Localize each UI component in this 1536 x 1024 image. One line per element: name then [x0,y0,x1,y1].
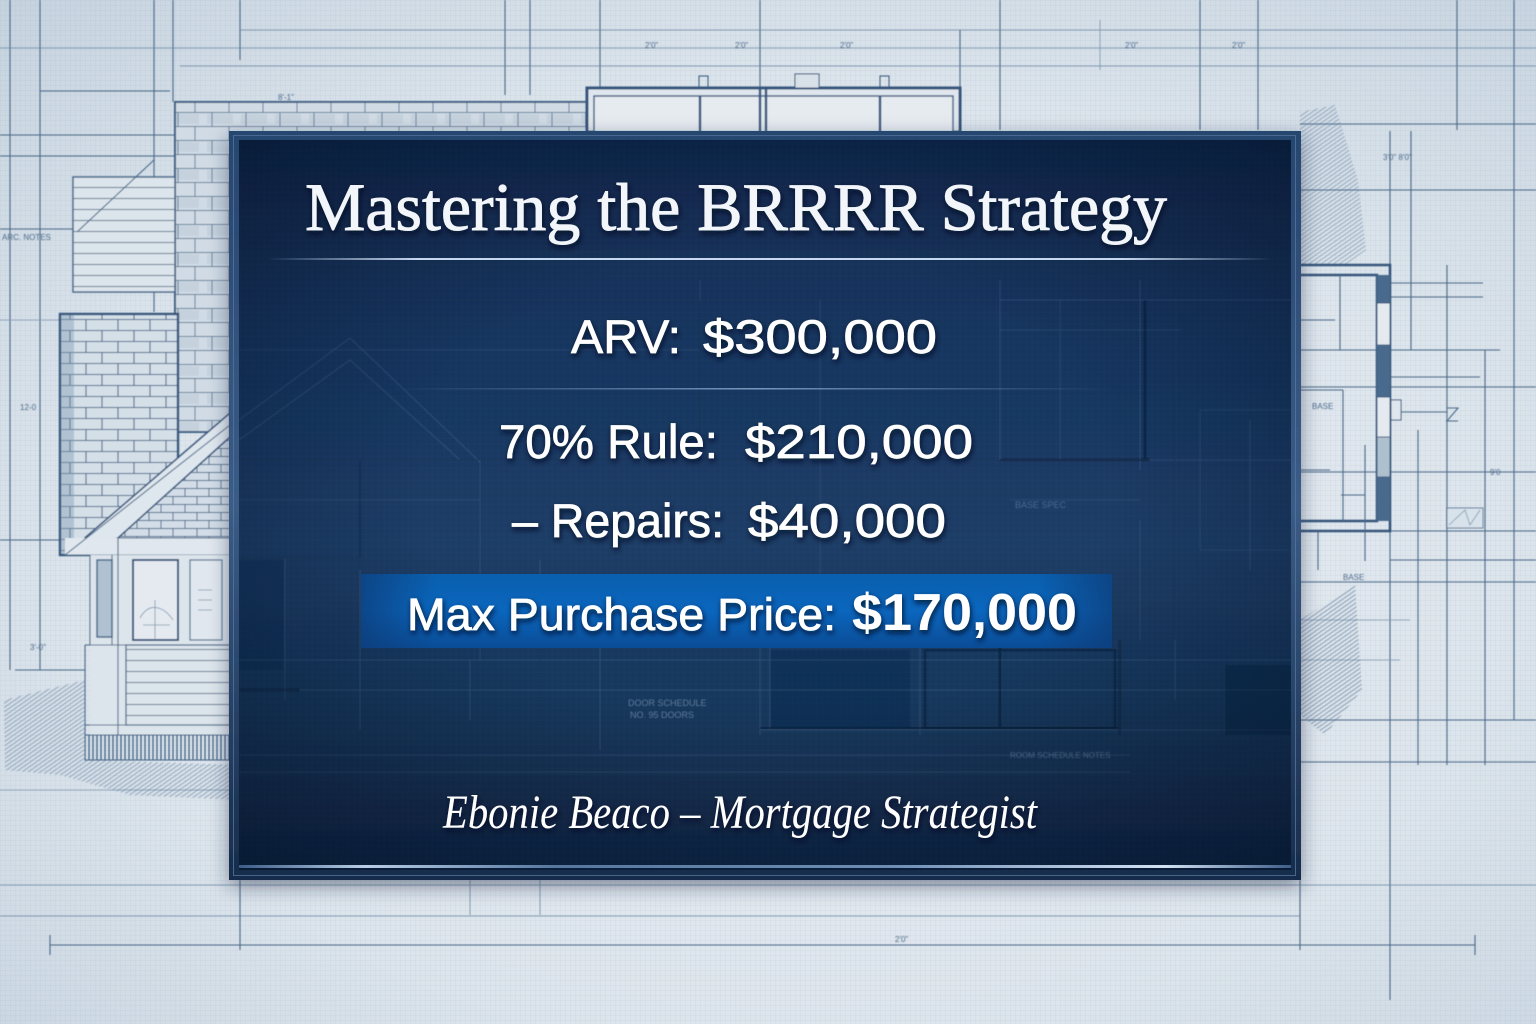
panel frame [229,131,1301,880]
metric: ARV [571,310,937,363]
panel vignette [239,140,1291,870]
upper brick wall [175,102,590,432]
blueprint drawing: right room plan: BASE [1312,402,1333,411]
panel: ghosted floor plan inside board: DOOR SCHEDULE [628,698,707,708]
metric: repairs: – Repairs: [512,494,724,547]
banner label: Max Purchase Price: [407,589,836,640]
blueprint drawing: right room plan: 3'0" 8'0" [1383,153,1412,162]
metric: 70% rule [499,415,973,468]
title divider [268,258,1272,260]
metric: ARV: ARV: [571,310,681,363]
panel bottom highlight [239,865,1291,868]
blueprint drawing: right room plan: BASE [1343,573,1364,582]
blueprint drawing: top floor plan: 2'0" [645,41,658,50]
blueprint drawing: top floor plan: 2'0" [1232,41,1245,50]
blueprint drawing: top floor plan: 2'0" [840,41,853,50]
small dimension notes left: 8'-1" [278,93,294,102]
banner value: $170,000 [852,584,1077,642]
panel: dark blue board [229,131,1301,880]
left brick wing [60,314,178,555]
siding panel [73,160,175,292]
roof and shingles [65,413,230,555]
metric: ARV: $300,000 [703,310,937,363]
metric: 70% rule: $210,000 [745,415,973,468]
small dimension notes left [2,93,294,652]
panel fill [239,140,1291,870]
blueprint drawing: top floor plan: 2'0" [735,41,748,50]
metric: 70% rule: 70% Rule: [499,415,718,468]
panel: ghosted floor plan inside board: BASE SPEC [1015,500,1067,510]
blueprint drawing: right room plan [1300,105,1501,735]
blueprint drawing: top floor plan: 2'0" [895,935,908,944]
ground-floor walls and windows [85,538,230,760]
panel: ghosted floor plan inside board [239,280,1290,773]
blueprint drawing: house elevation [2,93,590,800]
ground hatching [4,680,240,800]
metric: repairs [512,494,946,547]
title: Mastering the BRRRR Strategy [305,169,1167,245]
panel: ghosted floor plan inside board: NO. 95 DOORS [630,710,694,720]
blueprint drawing: top floor plan: 2'0" [1125,41,1138,50]
blueprint drawing: right room plan: 9'0 [1490,468,1501,477]
small dimension notes left: 3'-0" [30,643,46,652]
signature: Ebonie Beaco – Mortgage Strategist [442,786,1038,839]
blueprint drawing: top floor plan [587,41,1245,944]
panel: ghosted floor plan inside board: ROOM SCHEDULE NOTES [1010,751,1110,760]
small dimension notes left: ARC. NOTES [2,233,51,242]
callout: max purchase price banner [361,574,1112,648]
metric divider [393,388,1113,390]
small dimension notes left: 12-0 [20,403,37,412]
metric: repairs: $40,000 [748,494,946,547]
